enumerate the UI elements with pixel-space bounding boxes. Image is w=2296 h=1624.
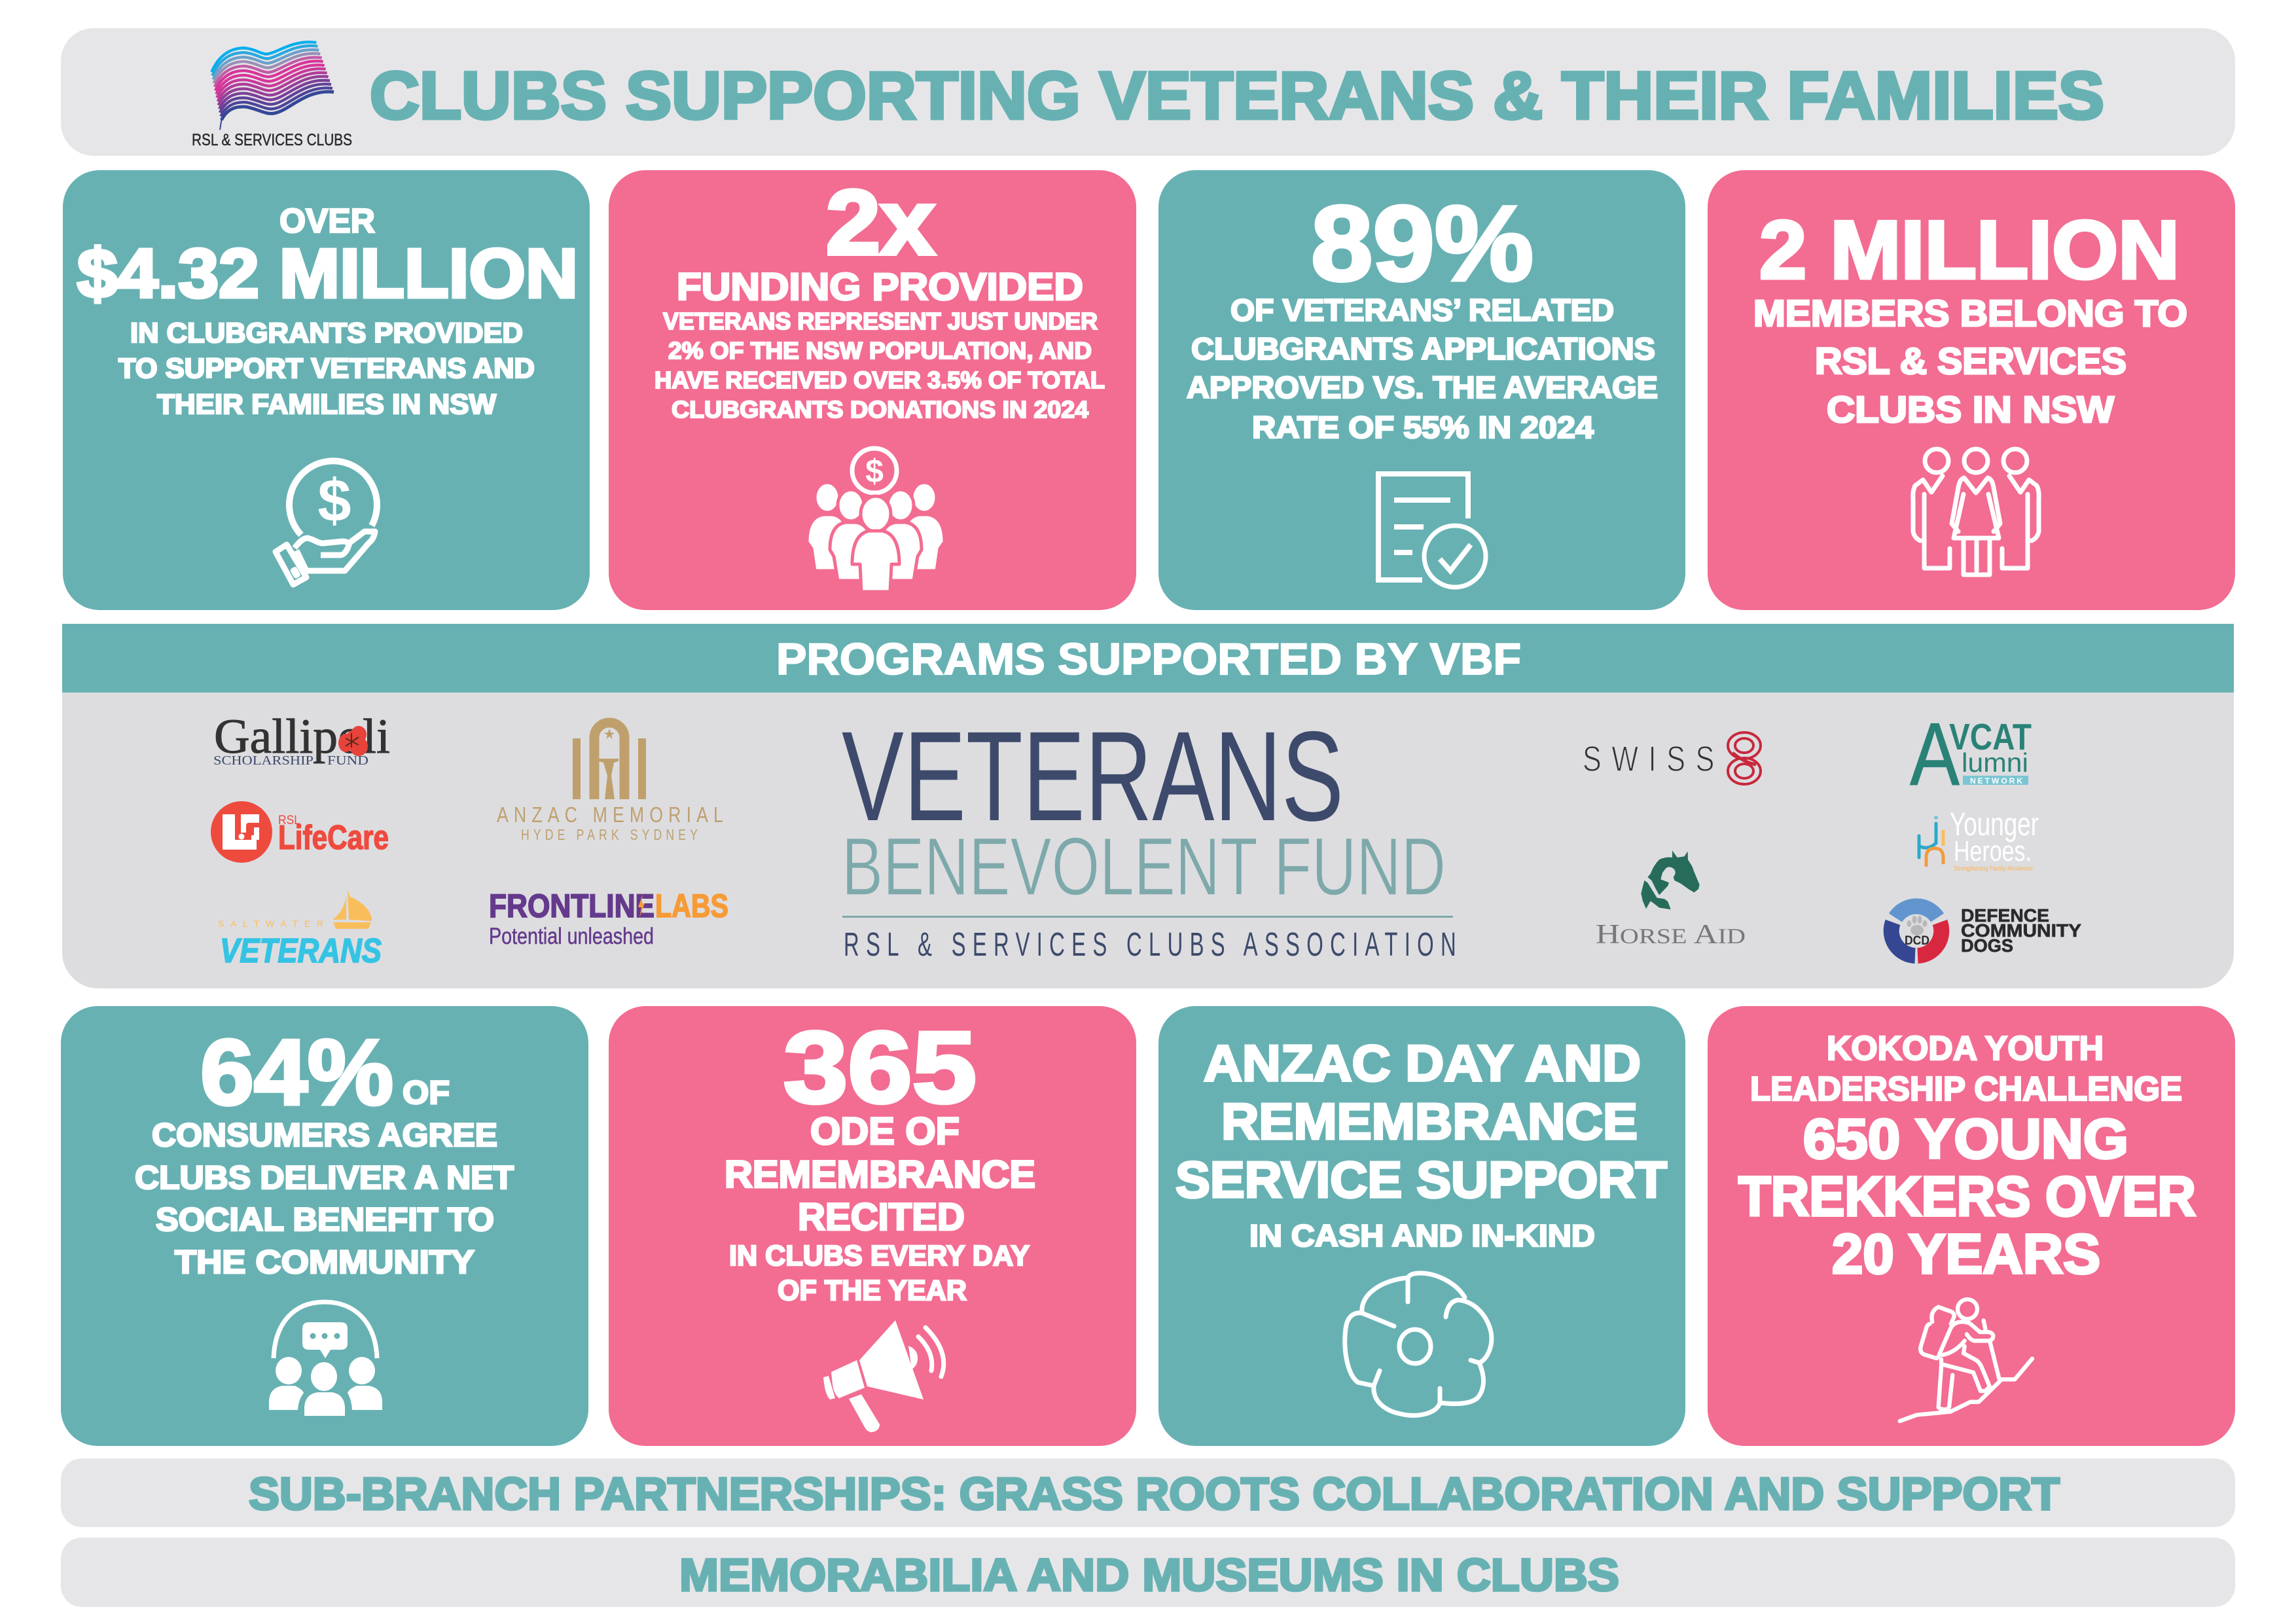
logo: Veterans Benevolent Fund: [842, 705, 1463, 963]
stat text: 64% of consumers: THE COMMUNITY: [175, 1244, 475, 1280]
stat text: 365: RECITED: [798, 1196, 965, 1238]
icon: people with speech bubble: [269, 1302, 382, 1416]
logo: Younger Heroes: Younger: [1950, 806, 2039, 842]
stat text: 64% of consumers: 64%: [200, 1020, 393, 1125]
logo: Gallipoli Scholarship Fund: FUND: [327, 753, 368, 768]
logo: Swiss 8: SWISS: [1583, 738, 1725, 779]
stat text: Kokoda trekkers: 650 YOUNG: [1803, 1108, 2128, 1170]
logo: Younger Heroes: Strengthening Family Resilience: [1954, 865, 2033, 873]
panel: 2x funding provided: [609, 170, 1136, 610]
logo: RSL LifeCare: LifeCare: [278, 819, 389, 857]
logo: Veterans Benevolent Fund: VETERANS: [842, 705, 1344, 848]
stat text: 4.32 million: $4.32 MILLION: [77, 235, 578, 312]
stat text: 2x: 2% OF THE NSW POPULATION, AND: [668, 337, 1092, 364]
logo: Anzac Memorial Hyde Park Sydney: ANZAC MEMORIAL: [497, 803, 728, 827]
panel: clubgrants funding: [63, 170, 590, 610]
logo: RSL and Services Clubs flag: RSL & SERVICES CLUBS: [192, 131, 352, 149]
stat text: 89%: [1187, 183, 1658, 444]
logo: RSL and Services Clubs flag: [192, 42, 352, 149]
logo: Defence Community Dogs: DEFENCE: [1961, 905, 2049, 926]
logo: Horse Aid: [1596, 850, 1746, 950]
logo: Saltwater Veterans: VETERANS: [220, 932, 382, 970]
stat text: 2x: [655, 171, 1105, 423]
banner: memorabilia and museums: [61, 1538, 2235, 1607]
stat text: 2x: FUNDING PROVIDED: [677, 266, 1083, 308]
stat text: 2 million: CLUBS IN NSW: [1827, 389, 2114, 431]
logo: Defence Community Dogs: COMMUNITY: [1961, 920, 2081, 941]
logo: AVCAT Alumni Network: lumni: [1962, 748, 2028, 778]
logo: Younger Heroes: Heroes.: [1954, 835, 2032, 867]
stat text: Kokoda trekkers: 20 YEARS: [1832, 1223, 2100, 1286]
stat text: Kokoda trekkers: LEADERSHIP CHALLENGE: [1750, 1070, 2182, 1108]
stat text: Anzac Day: IN CASH AND IN-KIND: [1249, 1218, 1595, 1253]
logo: Anzac Memorial Hyde Park Sydney: HYDE PARK SYDNEY: [521, 826, 702, 843]
logo: AVCAT Alumni Network: VCAT: [1949, 716, 2032, 758]
stat text: 89%: APPROVED VS. THE AVERAGE: [1187, 370, 1658, 405]
logo: Anzac Memorial Hyde Park Sydney: [497, 723, 728, 843]
logo: Gallipoli Scholarship Fund: SCHOLARSHIP: [213, 753, 314, 768]
stat text: 365: OF THE YEAR: [778, 1274, 967, 1307]
stat text: 365: [725, 1011, 1035, 1307]
stat text: 4.32 million: [77, 202, 578, 420]
icon: hand holding dollar coin: [276, 461, 377, 585]
stat text: 4.32 million: TO SUPPORT VETERANS AND: [118, 353, 535, 384]
icon: crowd with dollar coin: [807, 448, 944, 592]
icon: crowd with dollar coin: $: [865, 453, 884, 490]
panel: Anzac Day and remembrance: [1158, 1006, 1685, 1446]
logo: Defence Community Dogs: [1892, 905, 2081, 956]
title: CLUBS SUPPORTING VETERANS & THEIR FAMILIES: [370, 58, 2104, 133]
logo: Defence Community Dogs: DCD: [1905, 934, 1929, 948]
stat text: 2 million: RSL & SERVICES: [1815, 340, 2126, 382]
stat text: 365: ODE OF: [810, 1110, 960, 1153]
stat text: 4.32 million: IN CLUBGRANTS PROVIDED: [130, 317, 523, 349]
stat text: 89%: OF VETERANS’ RELATED: [1230, 293, 1614, 327]
stat text: 365: IN CLUBS EVERY DAY: [729, 1240, 1030, 1272]
logo: Frontline Labs: [489, 888, 728, 949]
banner: sub-branch partnerships: SUB-BRANCH PARTNERSHIPS: GRASS ROOTS COLLABORATION AND SUPPORT: [249, 1468, 2060, 1519]
banner: memorabilia and museums: MEMORABILIA AND MUSEUMS IN CLUBS: [679, 1549, 1619, 1600]
banner: sub-branch partnerships: [61, 1458, 2235, 1527]
logo: Frontline Labs: LABS: [655, 888, 728, 924]
panel: 365 ode of remembrance: [609, 1006, 1136, 1446]
logo: Veterans Benevolent Fund: BENEVOLENT FUND: [842, 821, 1446, 912]
stat text: 64% of consumers: CONSUMERS AGREE: [152, 1117, 497, 1153]
logo: Younger Heroes: [1919, 806, 2039, 873]
icon: hand holding dollar coin: $: [317, 467, 351, 534]
stat text: 2 million: MEMBERS BELONG TO: [1753, 293, 2187, 334]
logo: RSL LifeCare: RSL: [278, 814, 300, 827]
stat text: 89%: 89%: [1311, 183, 1534, 303]
panel: 64 percent consumers agree: [61, 1006, 588, 1446]
stat text: Anzac Day: REMEMBRANCE: [1221, 1092, 1638, 1150]
stat text: 89%: RATE OF 55% IN 2024: [1252, 410, 1594, 444]
stat text: 2x: 2x: [826, 171, 935, 274]
panel: 89 percent approved: [1158, 170, 1685, 610]
logo: Saltwater Veterans: SALTWATER: [218, 918, 323, 929]
stat text: Anzac Day: [1175, 1034, 1667, 1253]
logo: AVCAT Alumni Network: NETWORK: [1970, 776, 2022, 785]
logo: RSL LifeCare: [211, 801, 389, 863]
logo: Gallipoli Scholarship Fund: Gallipoli: [214, 710, 390, 764]
logo: AVCAT Alumni Network: [1910, 704, 2032, 804]
stat text: Kokoda trekkers: [1738, 1030, 2196, 1286]
stat text: 64% of consumers: SOCIAL BENEFIT TO: [156, 1201, 494, 1238]
logo: Horse Aid: HORSE AID: [1596, 920, 1746, 950]
stat text: 2x: HAVE RECEIVED OVER 3.5% OF TOTAL: [655, 367, 1105, 393]
heading: programs supported by VBF: PROGRAMS SUPPORTED BY VBF: [776, 634, 1521, 684]
stat text: 2x: CLUBGRANTS DONATIONS IN 2024: [672, 396, 1088, 423]
stat text: Kokoda trekkers: KOKODA YOUTH: [1827, 1030, 2104, 1068]
panel: header bar: [61, 28, 2235, 156]
stat text: 89%: CLUBGRANTS APPLICATIONS: [1191, 331, 1655, 366]
stat text: 2x: VETERANS REPRESENT JUST UNDER: [663, 308, 1098, 334]
panel: 2 million members: [1708, 170, 2235, 610]
panel: programs supported by VBF: [62, 624, 2234, 988]
panel: Kokoda youth leadership challenge: [1708, 1006, 2235, 1446]
stat text: 64% of consumers: CLUBS DELIVER A NET: [135, 1159, 514, 1196]
stat text: Anzac Day: ANZAC DAY AND: [1204, 1034, 1641, 1092]
stat text: 2 million: [1753, 204, 2187, 431]
stat text: 365: 365: [783, 1011, 977, 1124]
stat text: 64% of consumers: OF: [403, 1074, 450, 1111]
stat text: 4.32 million: THEIR FAMILIES IN NSW: [157, 389, 496, 420]
logo: Veterans Benevolent Fund: RSL & SERVICES CLUBS ASSOCIATION: [844, 926, 1463, 963]
stat text: Anzac Day: SERVICE SUPPORT: [1175, 1151, 1667, 1208]
logo: Defence Community Dogs: DOGS: [1961, 935, 2013, 956]
stat text: 2 million: 2 MILLION: [1759, 204, 2179, 296]
logo: Frontline Labs: FRONTLINE: [489, 888, 655, 924]
stat text: 4.32 million: OVER: [279, 202, 375, 240]
stat text: 365: REMEMBRANCE: [725, 1153, 1035, 1196]
icon: hiker on slope: [1900, 1299, 2032, 1421]
icon: three people outline: [1913, 449, 2039, 575]
logo: Saltwater Veterans: [218, 890, 382, 970]
stat text: 64% of consumers: [135, 1020, 514, 1280]
icon: megaphone: [823, 1320, 944, 1432]
icon: document with check mark: [1378, 474, 1486, 587]
stat text: Kokoda trekkers: TREKKERS OVER: [1738, 1166, 2196, 1228]
logo: Frontline Labs: Potential unleashed: [489, 924, 654, 949]
icon: poppy flower: [1345, 1273, 1492, 1415]
logo: AVCAT Alumni Network: A: [1910, 704, 1960, 804]
